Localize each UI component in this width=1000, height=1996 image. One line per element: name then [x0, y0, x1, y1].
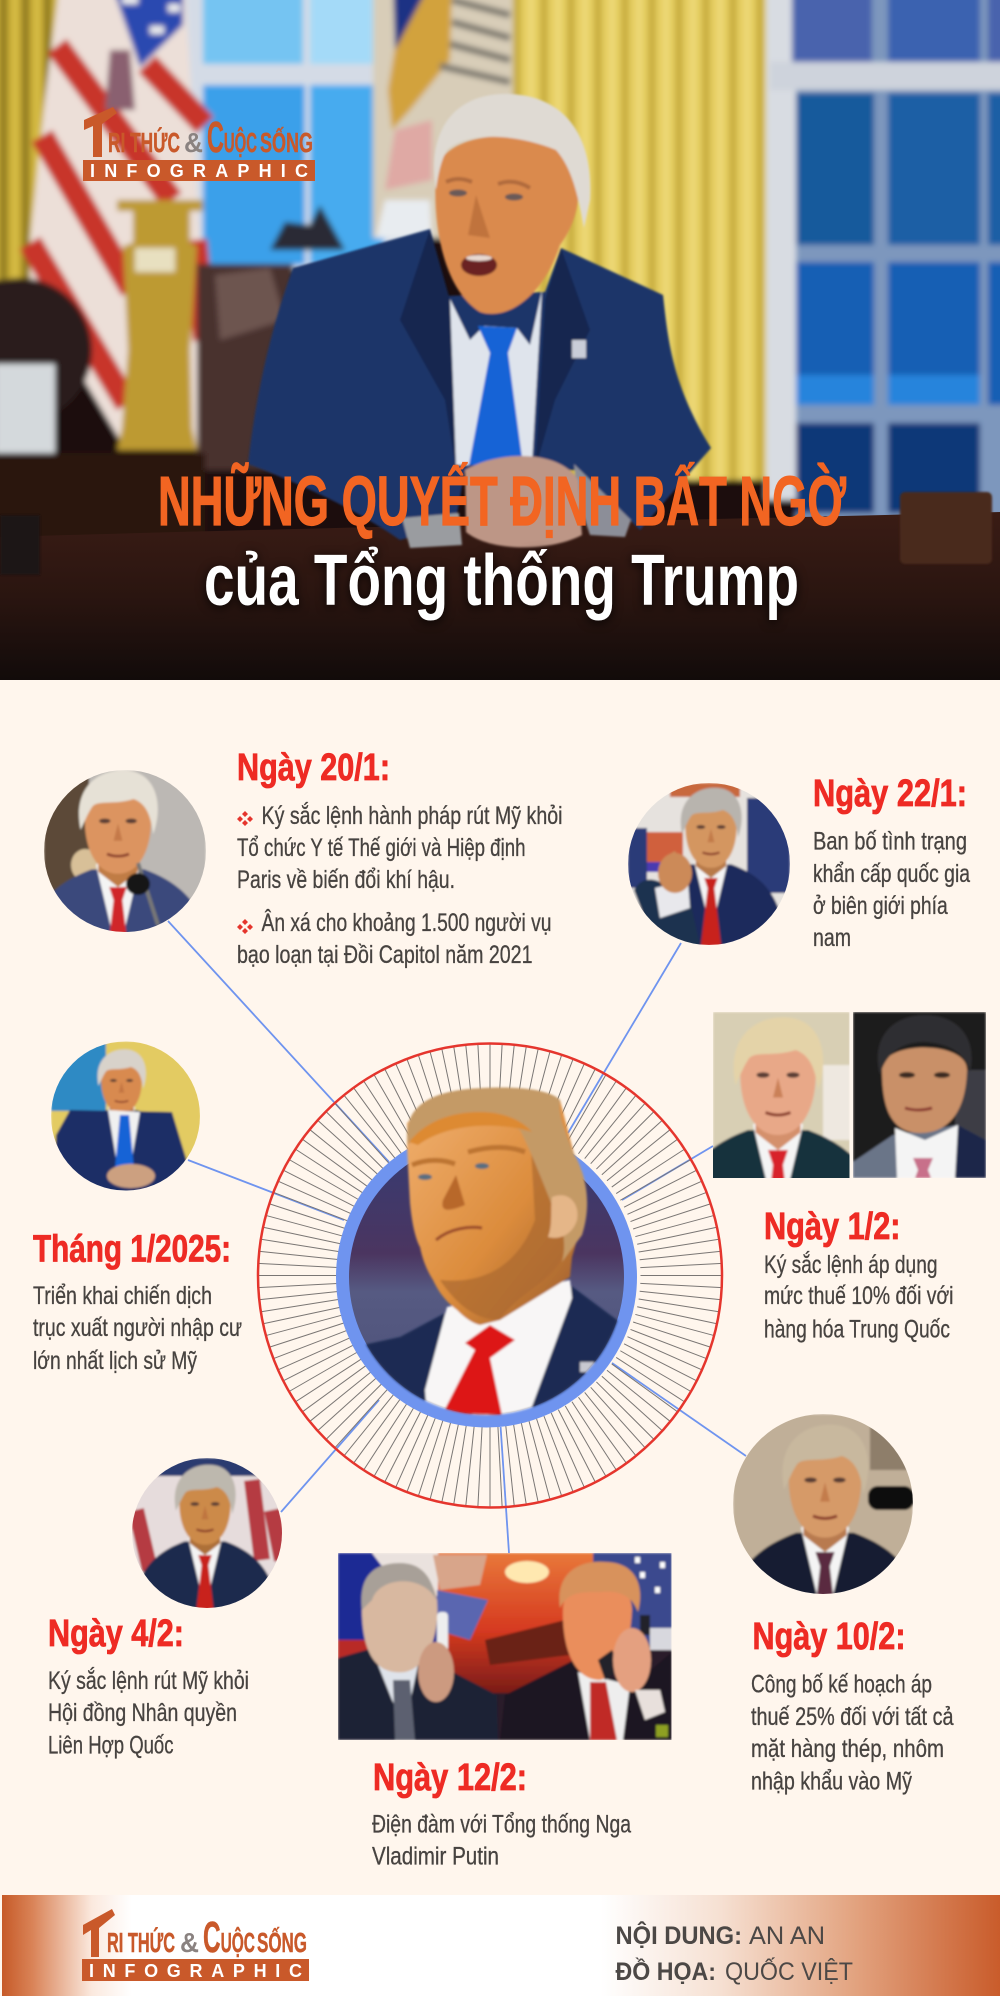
logo: Tri thuc & Cuoc song, top: SỐNG [260, 126, 313, 158]
logo: Tri thuc & Cuoc song, top [83, 107, 315, 181]
body text [33, 1282, 242, 1375]
logo: Tri thuc & Cuoc song, top: RI THỨC [108, 127, 180, 158]
photo: Trump pointing [628, 783, 790, 946]
body text 1: Tổ chức Y tế Thế giới và Hiệp định [237, 834, 526, 862]
photo: Trump [713, 1012, 850, 1178]
panel: Ngay 22/1 [628, 773, 970, 952]
body text 1: Paris về biến đổi khí hậu. [237, 866, 455, 894]
body text: ở biên giới phía [813, 892, 948, 920]
heading: Ngày 10/2: [752, 1616, 906, 1658]
connector lines [168, 921, 746, 1553]
photo: Putin and Trump on the phone [338, 1553, 672, 1740]
photo: Xi Jinping [853, 1012, 986, 1178]
footer logo: & [180, 1927, 199, 1958]
body text: Hội đồng Nhân quyền [48, 1699, 237, 1727]
heading: Tháng 1/2025: [33, 1228, 231, 1270]
photo: Trump at microphone [733, 1414, 913, 1594]
panel: Ngay 12/2 [338, 1553, 672, 1870]
heading: Ngày 20/1: [237, 747, 390, 789]
heading: Ngày 12/2: [373, 1757, 527, 1799]
blue ring [342, 1133, 630, 1421]
panel: Ngay 1/2 [713, 1012, 986, 1343]
photo: Trump with flag [132, 1458, 282, 1608]
body text [48, 1666, 249, 1760]
body text: nam [813, 924, 851, 952]
body text 2: Ân xá cho khoảng 1.500 người vụ [262, 908, 552, 937]
credits: QUỐC VIỆT [725, 1956, 853, 1986]
logo: Tri thuc & Cuoc song, top: INFOGRAPHIC [90, 161, 308, 181]
logo: Tri thuc & Cuoc song, top: CUỘC [207, 113, 257, 162]
logo: Tri thuc & Cuoc song, top: & [184, 127, 203, 158]
body text 1 [237, 801, 562, 894]
bullet 1 [237, 811, 253, 826]
body text: Triển khai chiến dịch [33, 1282, 212, 1310]
credits: AN AN [749, 1922, 825, 1950]
hero photo: Trump at the Oval Office desk [0, 0, 1000, 680]
body text 2 [237, 908, 552, 969]
body text: Ký sắc lệnh rút Mỹ khỏi [48, 1666, 249, 1695]
footer logo: SỐNG [257, 1926, 307, 1958]
credits [616, 1920, 853, 1986]
body text: Công bố kế hoạch áp [751, 1670, 932, 1698]
body text [813, 828, 970, 952]
body text: lớn nhất lịch sử Mỹ [33, 1347, 197, 1375]
panel: Ngay 20/1 [21, 747, 562, 975]
footer logo [82, 1909, 309, 1981]
footer band [2, 1895, 1000, 1996]
title: của Tổng thống Trump [204, 541, 799, 621]
president figure [248, 94, 711, 548]
heading: Ngày 1/2: [764, 1206, 900, 1248]
title [158, 462, 846, 621]
body text [751, 1670, 954, 1796]
body text: mặt hàng thép, nhôm [751, 1735, 944, 1763]
bullet 2 [237, 919, 253, 934]
footer logo: RI THỨC [107, 1927, 175, 1958]
heading: Ngày 4/2: [48, 1613, 184, 1655]
body text: Vladimir Putin [372, 1842, 499, 1870]
body text: Ký sắc lệnh áp dụng [764, 1250, 938, 1279]
body text 2: bạo loạn tại Đồi Capitol năm 2021 [237, 941, 532, 969]
body text: nhập khẩu vào Mỹ [751, 1768, 912, 1796]
body text: Điện đàm với Tổng thống Nga [372, 1810, 631, 1838]
panel: Ngay 10/2 [719, 1414, 954, 1796]
credits: NỘI DUNG: [616, 1920, 742, 1950]
body text 1: Ký sắc lệnh hành pháp rút Mỹ khỏi [262, 801, 562, 830]
body text: Liên Hợp Quốc [48, 1732, 174, 1760]
body text: hàng hóa Trung Quốc [764, 1316, 950, 1344]
body text: Ban bố tình trạng [813, 828, 967, 856]
body text: thuế 25% đối với tất cả [751, 1703, 954, 1731]
credits: ĐỒ HỌA: [616, 1956, 716, 1986]
panel: Thang 1/2025 [33, 1041, 242, 1375]
panel: Ngay 4/2 [48, 1458, 282, 1760]
red outer ring [258, 1044, 722, 1508]
office background [0, 0, 1000, 580]
photo: Trump in Oval Office [51, 1041, 201, 1192]
radial ticks [190, 989, 790, 1562]
body text [372, 1810, 631, 1870]
desk [0, 512, 1000, 680]
photo: Trump with microphone [44, 770, 206, 932]
body text [764, 1250, 954, 1344]
central portrait [365, 1086, 618, 1416]
footer logo: CUỘC [203, 1913, 255, 1962]
footer logo: INFOGRAPHIC [89, 1961, 302, 1981]
desk items [0, 492, 992, 575]
central radial diagram [256, 1042, 724, 1509]
body text: trục xuất người nhập cư [33, 1314, 242, 1342]
heading: Ngày 22/1: [813, 773, 967, 815]
